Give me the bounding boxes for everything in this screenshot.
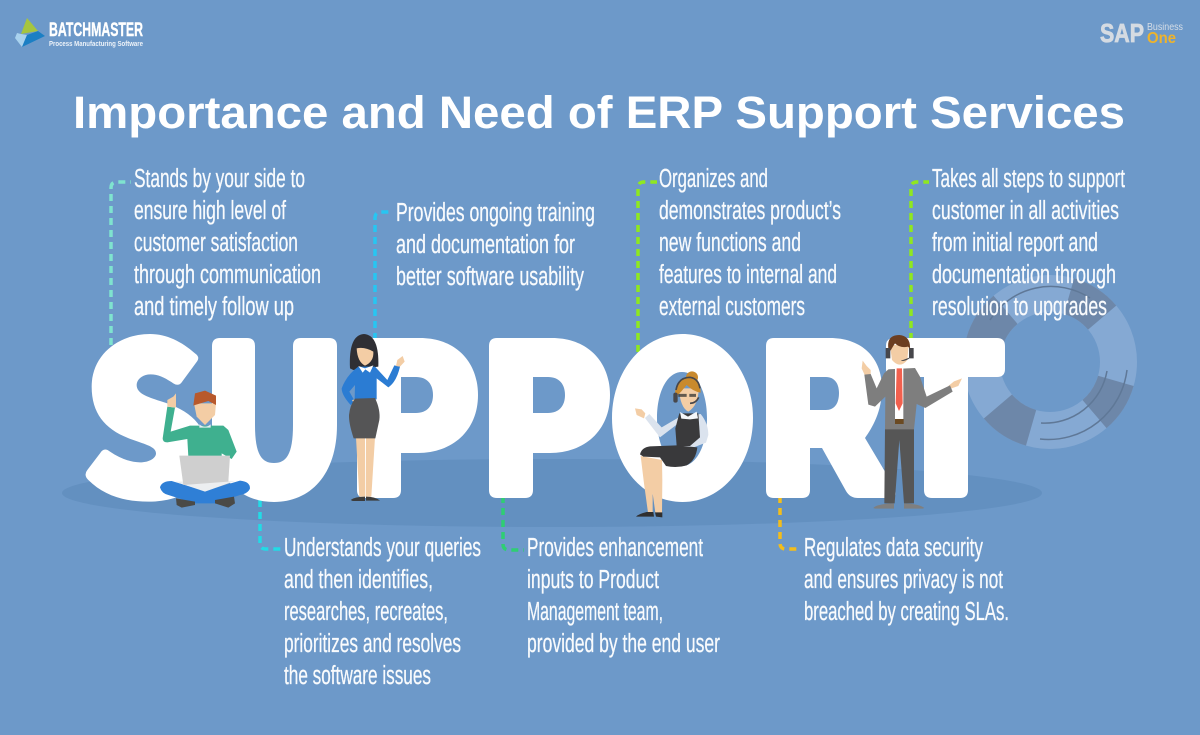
text: support steps: customer in all activities	[932, 197, 1119, 225]
text: customer satisfaction: customer satisfaction	[134, 229, 298, 257]
title: Importance and Need of ERP Support Services	[73, 87, 1125, 138]
shoes	[636, 512, 662, 517]
letter U	[212, 338, 337, 502]
text: support steps: resolution to upgrades	[932, 293, 1107, 321]
connector: teal	[111, 182, 131, 345]
face	[679, 388, 699, 412]
shirt	[895, 368, 903, 419]
skirt	[349, 398, 380, 438]
letter P	[357, 338, 478, 498]
hair	[888, 335, 910, 351]
text: training and documentation: better software usability	[396, 263, 584, 291]
connector: yellow	[780, 496, 801, 549]
text: support steps	[932, 165, 1125, 321]
headset	[886, 348, 913, 361]
text: queries: researches, recreates,	[284, 598, 448, 626]
connector: cyan	[260, 500, 281, 549]
letter S	[86, 334, 208, 502]
icon: lifebuoy	[965, 277, 1135, 447]
figure: seated woman with headset	[635, 371, 708, 517]
skirt	[640, 445, 697, 467]
letter T	[886, 338, 1005, 498]
collar	[358, 365, 373, 373]
text: product demonstrations: Organizes and	[659, 165, 768, 193]
connector: sky blue	[375, 212, 393, 340]
text: enhancement inputs: provided by the end user	[527, 630, 720, 658]
text: enhancement inputs: inputs to Product	[527, 566, 659, 594]
text: training and documentation: and documentation for	[396, 231, 575, 259]
legs	[356, 437, 375, 497]
figure: standing man with headset	[862, 335, 962, 509]
logo: BatchMaster	[15, 18, 143, 48]
belt	[895, 419, 904, 424]
connector: lime one	[638, 182, 657, 352]
earcups	[673, 393, 678, 403]
trousers	[884, 429, 914, 503]
text: queries: and then identifies,	[284, 566, 433, 594]
hair	[675, 377, 701, 397]
letter R	[766, 338, 896, 498]
text: enhancement inputs	[527, 534, 720, 658]
text: customer satisfaction: ensure high level of	[134, 197, 287, 225]
connector: green	[503, 496, 524, 550]
hair	[193, 391, 216, 406]
text: queries: Understands your queries	[284, 534, 481, 562]
face	[357, 348, 373, 366]
hair	[350, 334, 378, 370]
text: product demonstrations: demonstrates product’s	[659, 197, 841, 225]
neck and face	[890, 345, 909, 365]
logo: SAP Business One: SAP	[1100, 18, 1144, 48]
text: data security	[804, 534, 1009, 626]
shoes	[351, 497, 380, 501]
tie	[896, 368, 903, 411]
text: support steps: documentation through	[932, 261, 1116, 289]
letter O	[612, 334, 753, 502]
text: data security: Regulates data security	[804, 534, 983, 562]
legs	[160, 481, 250, 503]
text: data security: and ensures privacy is not	[804, 566, 1003, 594]
shoes	[176, 497, 235, 508]
face	[194, 403, 216, 425]
logo: SAP Business One: Business	[1147, 21, 1183, 33]
collar	[199, 424, 211, 428]
sleeves	[645, 414, 708, 452]
connector: lime two	[911, 182, 929, 340]
laptop base	[175, 481, 235, 492]
text: support steps: from initial report and	[932, 229, 1098, 257]
legs	[641, 456, 662, 513]
blouse	[342, 365, 400, 405]
text: queries: the software issues	[284, 662, 431, 690]
hair bun	[686, 371, 698, 383]
hand	[167, 393, 176, 408]
word: SUPPORT	[86, 334, 1005, 502]
dress	[675, 413, 700, 446]
text: customer satisfaction: and timely follow up	[134, 293, 294, 321]
glasses	[678, 391, 696, 400]
text: enhancement inputs: Management team,	[527, 598, 663, 626]
figure: standing woman	[342, 334, 405, 501]
text: product demonstrations: features to internal and	[659, 261, 837, 289]
text: data security: breached by creating SLAs.	[804, 598, 1009, 626]
text: training and documentation	[396, 199, 595, 291]
logo: BatchMaster: Process Manufacturing Software	[49, 39, 143, 48]
ground shadow	[62, 459, 1042, 527]
figure: seated man with laptop	[160, 391, 250, 508]
text: queries: prioritizes and resolves	[284, 630, 461, 658]
logo: SAP Business One	[1100, 18, 1183, 48]
laptop	[179, 456, 230, 485]
collar	[680, 412, 698, 419]
text: product demonstrations	[659, 165, 841, 321]
shoes	[873, 503, 924, 509]
hand	[862, 361, 962, 389]
headset	[676, 377, 700, 403]
logo: BatchMaster: BATCHMASTER	[49, 20, 143, 41]
sweater	[163, 407, 237, 459]
hand	[352, 356, 405, 405]
text: customer satisfaction	[134, 165, 321, 321]
text: customer satisfaction: through communication	[134, 261, 321, 289]
text: training and documentation: Provides ongoing training	[396, 199, 595, 227]
text: queries	[284, 534, 481, 690]
text: product demonstrations: external customers	[659, 293, 805, 321]
text: enhancement inputs: Provides enhancement	[527, 534, 703, 562]
text: customer satisfaction: Stands by your side to	[134, 165, 305, 193]
letter P	[489, 338, 610, 498]
hand	[635, 408, 686, 453]
text: product demonstrations: new functions and	[659, 229, 801, 257]
logo: SAP Business One: One	[1147, 30, 1176, 47]
jacket and arms	[864, 368, 953, 429]
